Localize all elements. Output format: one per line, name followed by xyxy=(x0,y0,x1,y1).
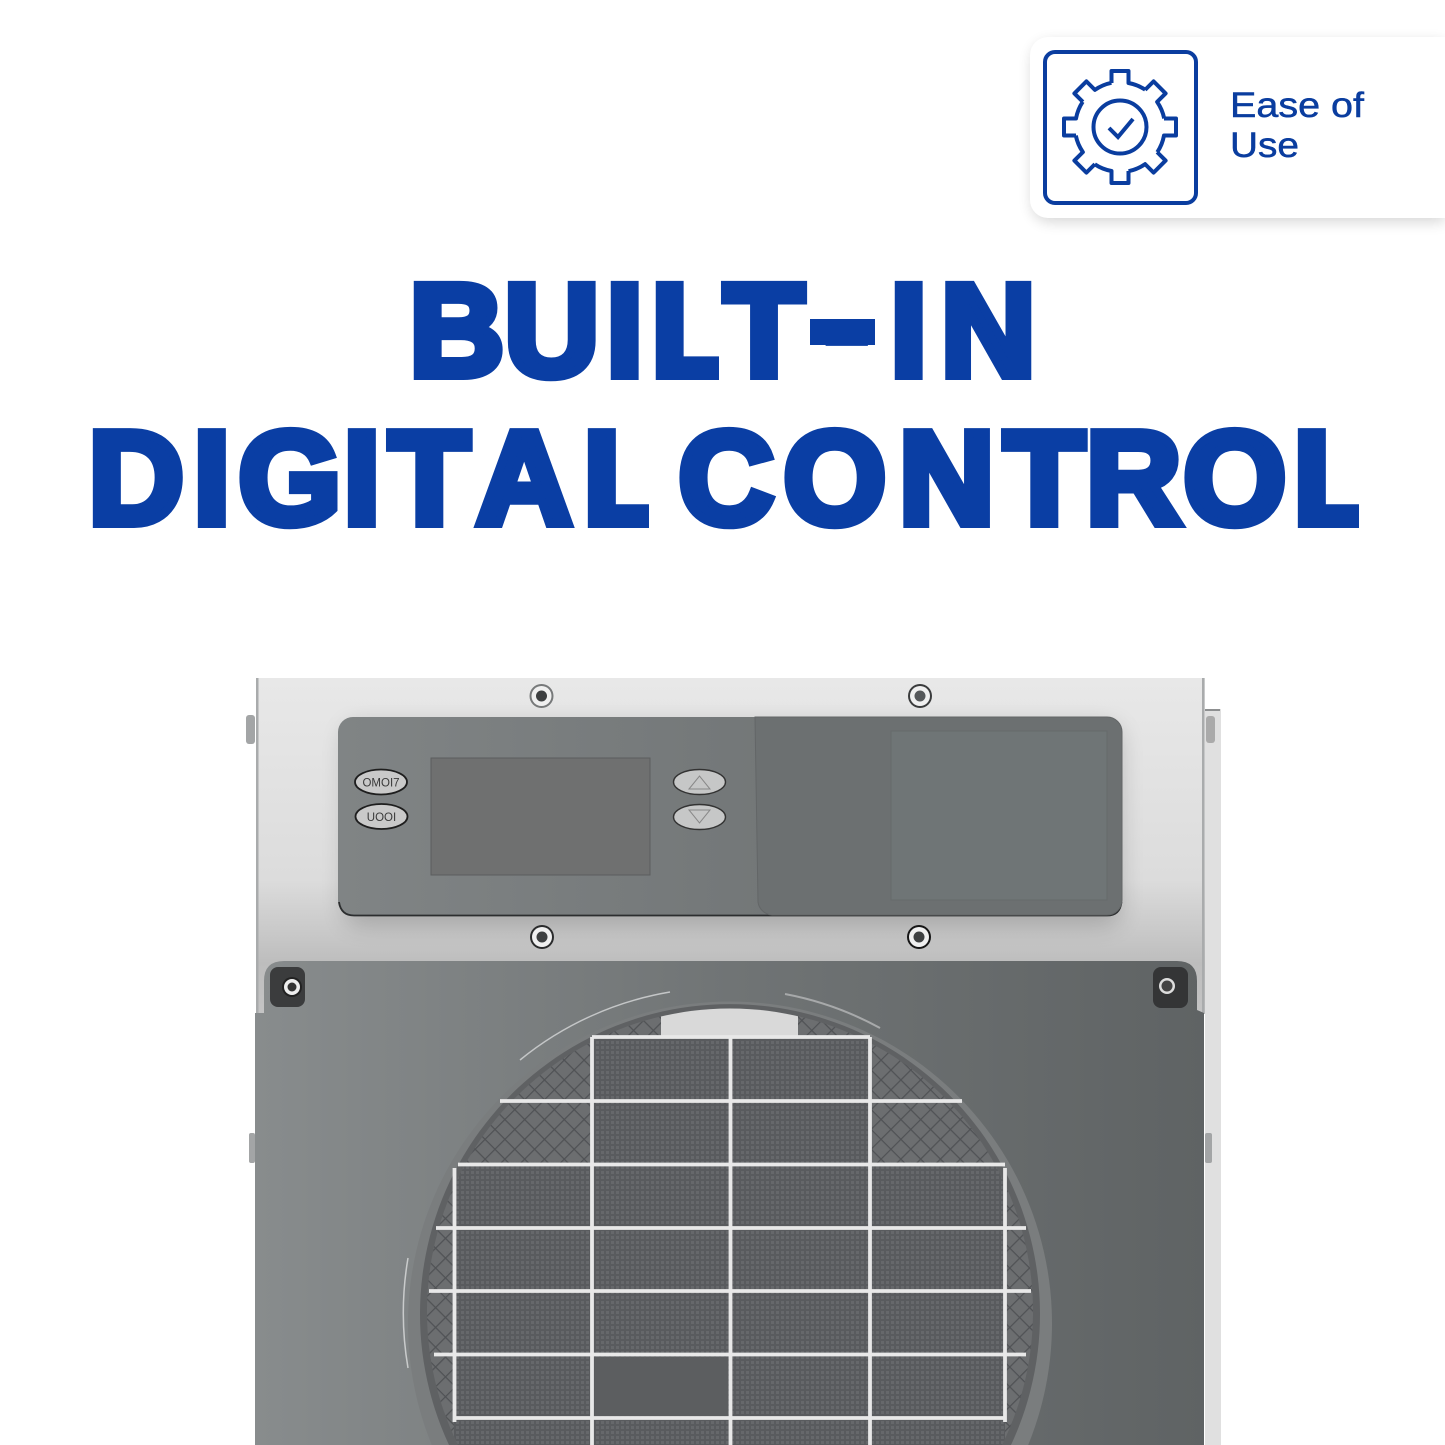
screws xyxy=(530,684,932,949)
control panel xyxy=(338,717,1122,916)
title: BUILT-IN xyxy=(410,248,1036,404)
white tab xyxy=(661,1008,798,1036)
blank cover xyxy=(755,717,1122,915)
mesh filter xyxy=(420,1005,1040,1445)
top plate xyxy=(256,678,1205,1014)
corner screw pockets xyxy=(270,967,305,1007)
buttons: on/off and mode: OMOI7 xyxy=(362,778,400,790)
side bracket and pins xyxy=(246,709,1221,1445)
badge label xyxy=(1230,86,1364,165)
white grille xyxy=(429,1037,1031,1445)
badge label: Ease of xyxy=(1230,86,1364,125)
buttons: on/off and mode: UOOI xyxy=(367,812,396,824)
buttons: on/off and mode xyxy=(355,770,408,829)
buttons: up and down arrows xyxy=(674,770,726,830)
display screen xyxy=(431,758,650,875)
badge: ease of use xyxy=(1030,37,1445,222)
title xyxy=(88,248,1383,552)
round filter opening xyxy=(403,992,1052,1445)
product: dehumidifier unit xyxy=(246,678,1221,1445)
lower front panel xyxy=(255,961,1204,1445)
icon: gear with check mark xyxy=(1045,52,1196,203)
badge label: Use xyxy=(1230,126,1299,165)
title: DIGITAL CONTROL xyxy=(88,404,1374,552)
